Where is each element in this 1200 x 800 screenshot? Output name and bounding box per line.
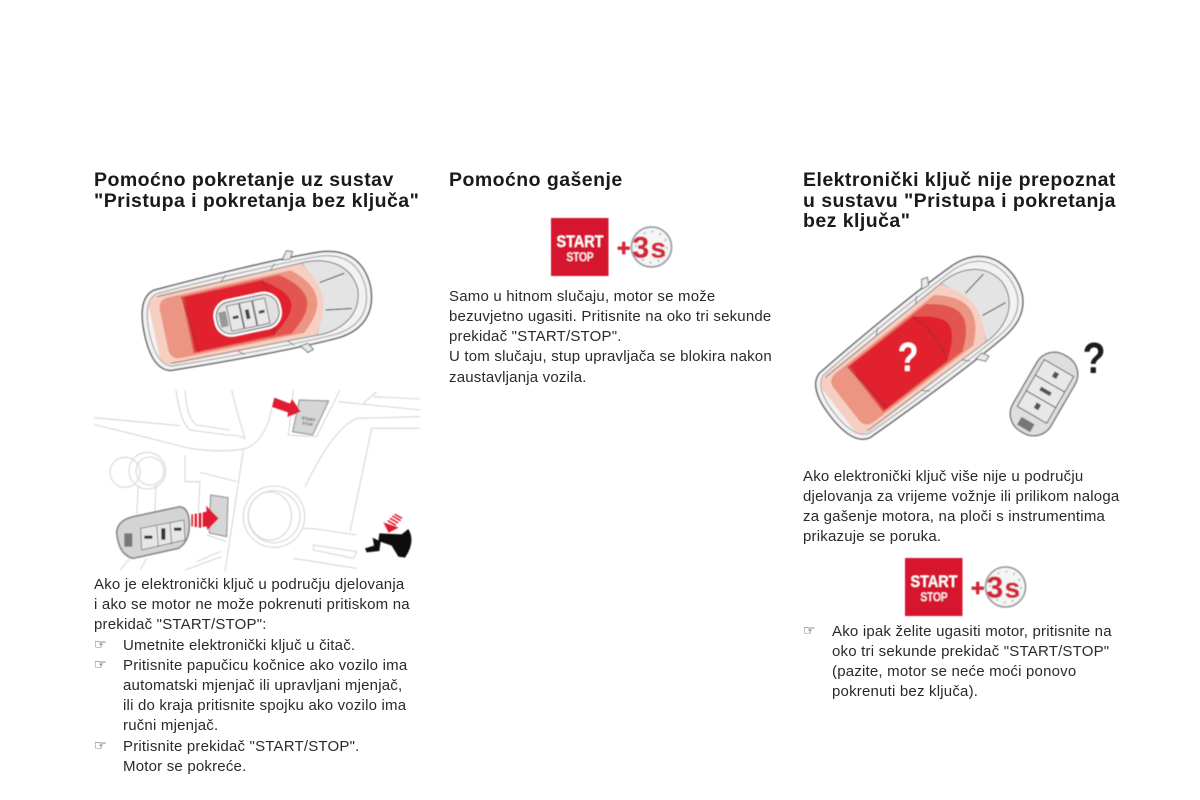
list: column 1 steps: ☞: [94, 738, 107, 754]
icon: key fob inside car: [211, 290, 284, 339]
heading: assisted stop: Pomoćno gašenje: [449, 169, 623, 191]
heading: key not recognised: [803, 169, 1116, 232]
icon: key fob: [117, 507, 189, 558]
list: column 1 steps: automatski mjenjač ili upravljani mjenjač,: [123, 677, 402, 694]
icon: start stop button: STOP: [302, 420, 314, 427]
illustration: car with key inside detection zone: [140, 250, 373, 372]
text: column 2 body: prekidač "START/STOP".: [449, 328, 622, 345]
illustration: car with unrecognised key: [814, 254, 1105, 441]
icon: start stop button: START: [301, 416, 316, 423]
list: column 1 steps: ☞: [94, 637, 107, 653]
text: column 2 body: [449, 288, 772, 386]
list: column 1 steps: Pritisnite prekidač "START/STOP".: [123, 738, 360, 755]
text: column 2 body: Samo u hitnom slučaju, motor se može: [449, 288, 715, 305]
text: column 1 intro: Ako je elektronički ključ u području djelovanja: [94, 576, 404, 593]
list: column 1 steps: [94, 637, 408, 775]
list: column 1 steps: ☞: [94, 657, 107, 673]
icon: brake pedal foot: [365, 514, 411, 558]
heading: key not recognised: u sustavu "Pristupa i pokretanja: [803, 190, 1116, 212]
heading: assisted start: Pomoćno pokretanje uz sustav: [94, 169, 394, 191]
icon: start stop plus 3 seconds (second): [904, 557, 1027, 617]
heading: key not recognised: bez ključa": [803, 210, 910, 232]
list: column 1 steps: Pritisnite papučicu kočnice ako vozilo ima: [123, 657, 407, 674]
arrow: red arrow to button: [272, 398, 301, 417]
text: column 1 intro: prekidač "START/STOP":: [94, 616, 267, 633]
heading: assisted start: [94, 169, 419, 212]
icon: start stop button: [293, 400, 329, 435]
text: column 2 body: bezuvjetno ugasiti. Pritisnite na oko tri sekunde: [449, 308, 771, 325]
list: column 3 step: ☞: [803, 623, 816, 639]
icon: key reader slot: [209, 495, 228, 537]
list: column 1 steps: ručni mjenjač.: [123, 717, 218, 734]
list: column 3 step: (pazite, motor se neće moći ponovo: [832, 663, 1076, 680]
icon: key fob outside car: [1003, 345, 1085, 443]
icon: start stop plus 3 seconds: [550, 217, 673, 277]
text: column 3 body: [803, 468, 1120, 545]
icon: white question mark: ?: [898, 334, 918, 380]
text: column 2 body: zaustavljanja vozila.: [449, 369, 587, 386]
arrow: red striped arrow to reader: [191, 506, 219, 530]
heading: key not recognised: Elektronički ključ nije prepoznat: [803, 169, 1116, 191]
text: column 1 intro: [94, 576, 410, 633]
list: column 3 step: [803, 623, 1112, 700]
list: column 1 steps: Umetnite elektronički ključ u čitač.: [123, 637, 355, 654]
text: column 3 body: Ako elektronički ključ više nije u području: [803, 468, 1083, 485]
list: column 1 steps: Motor se pokreće.: [123, 758, 246, 775]
text: column 1 intro: i ako se motor ne može pokrenuti pritiskom na: [94, 596, 410, 613]
list: column 1 steps: ili do kraja pritisnite spojku ako vozilo ima: [123, 697, 406, 714]
icon: black question mark: ?: [1083, 333, 1105, 383]
list: column 3 step: oko tri sekunde prekidač "START/STOP": [832, 643, 1109, 660]
text: column 2 body: U tom slučaju, stup upravljača se blokira nakon: [449, 348, 772, 365]
text: column 3 body: prikazuje se poruka.: [803, 528, 941, 545]
illustration: dashboard with key reader and button: [94, 390, 420, 572]
list: column 3 step: pokrenuti bez ključa).: [832, 683, 978, 700]
list: column 3 step: Ako ipak želite ugasiti motor, pritisnite na: [832, 623, 1112, 640]
heading: assisted start: "Pristupa i pokretanja bez ključa": [94, 190, 419, 212]
text: column 3 body: djelovanja za vrijeme vožnje ili prilikom naloga: [803, 488, 1119, 505]
text: column 3 body: za gašenje motora, na ploči s instrumentima: [803, 508, 1105, 525]
